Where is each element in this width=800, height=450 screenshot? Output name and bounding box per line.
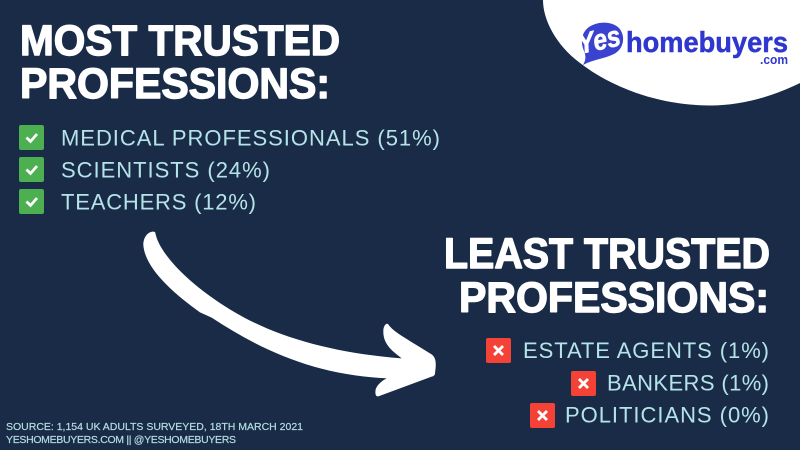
heading: least trusted professions: PROFESSIONS:	[459, 274, 769, 322]
list: least trusted	[486, 338, 769, 428]
item: bankers: BANKERS (1%)	[607, 370, 769, 396]
heading: most trusted professions	[20, 17, 340, 108]
item: politicians: POLITICIANS (0%)	[565, 403, 769, 428]
item: teachers: TEACHERS (12%)	[61, 189, 256, 214]
item: medical professionals: MEDICAL PROFESSIONALS (51%)	[61, 126, 440, 151]
heading: most trusted professions: PROFESSIONS:	[20, 60, 330, 108]
logo icon: speech bubble: Yes	[575, 21, 624, 61]
heading: least trusted professions	[444, 230, 770, 322]
logo panel	[543, 0, 800, 106]
source footer: YESHOMEBUYERS.COM || @YESHOMEBUYERS	[6, 434, 236, 446]
source footer	[6, 421, 303, 446]
item: scientists: SCIENTISTS (24%)	[61, 158, 270, 183]
heading: most trusted professions: MOST TRUSTED	[20, 17, 340, 65]
item: estate agents: ESTATE AGENTS (1%)	[523, 338, 769, 363]
list: most trusted	[19, 125, 440, 214]
logo domain: .com	[760, 52, 788, 67]
source footer: SOURCE: 1,154 UK ADULTS SURVEYED, 18TH MARCH 2021	[6, 421, 303, 433]
logo wordmark: homebuyers	[626, 27, 788, 59]
arrow	[143, 232, 436, 396]
heading: least trusted professions: LEAST TRUSTED	[444, 230, 770, 278]
